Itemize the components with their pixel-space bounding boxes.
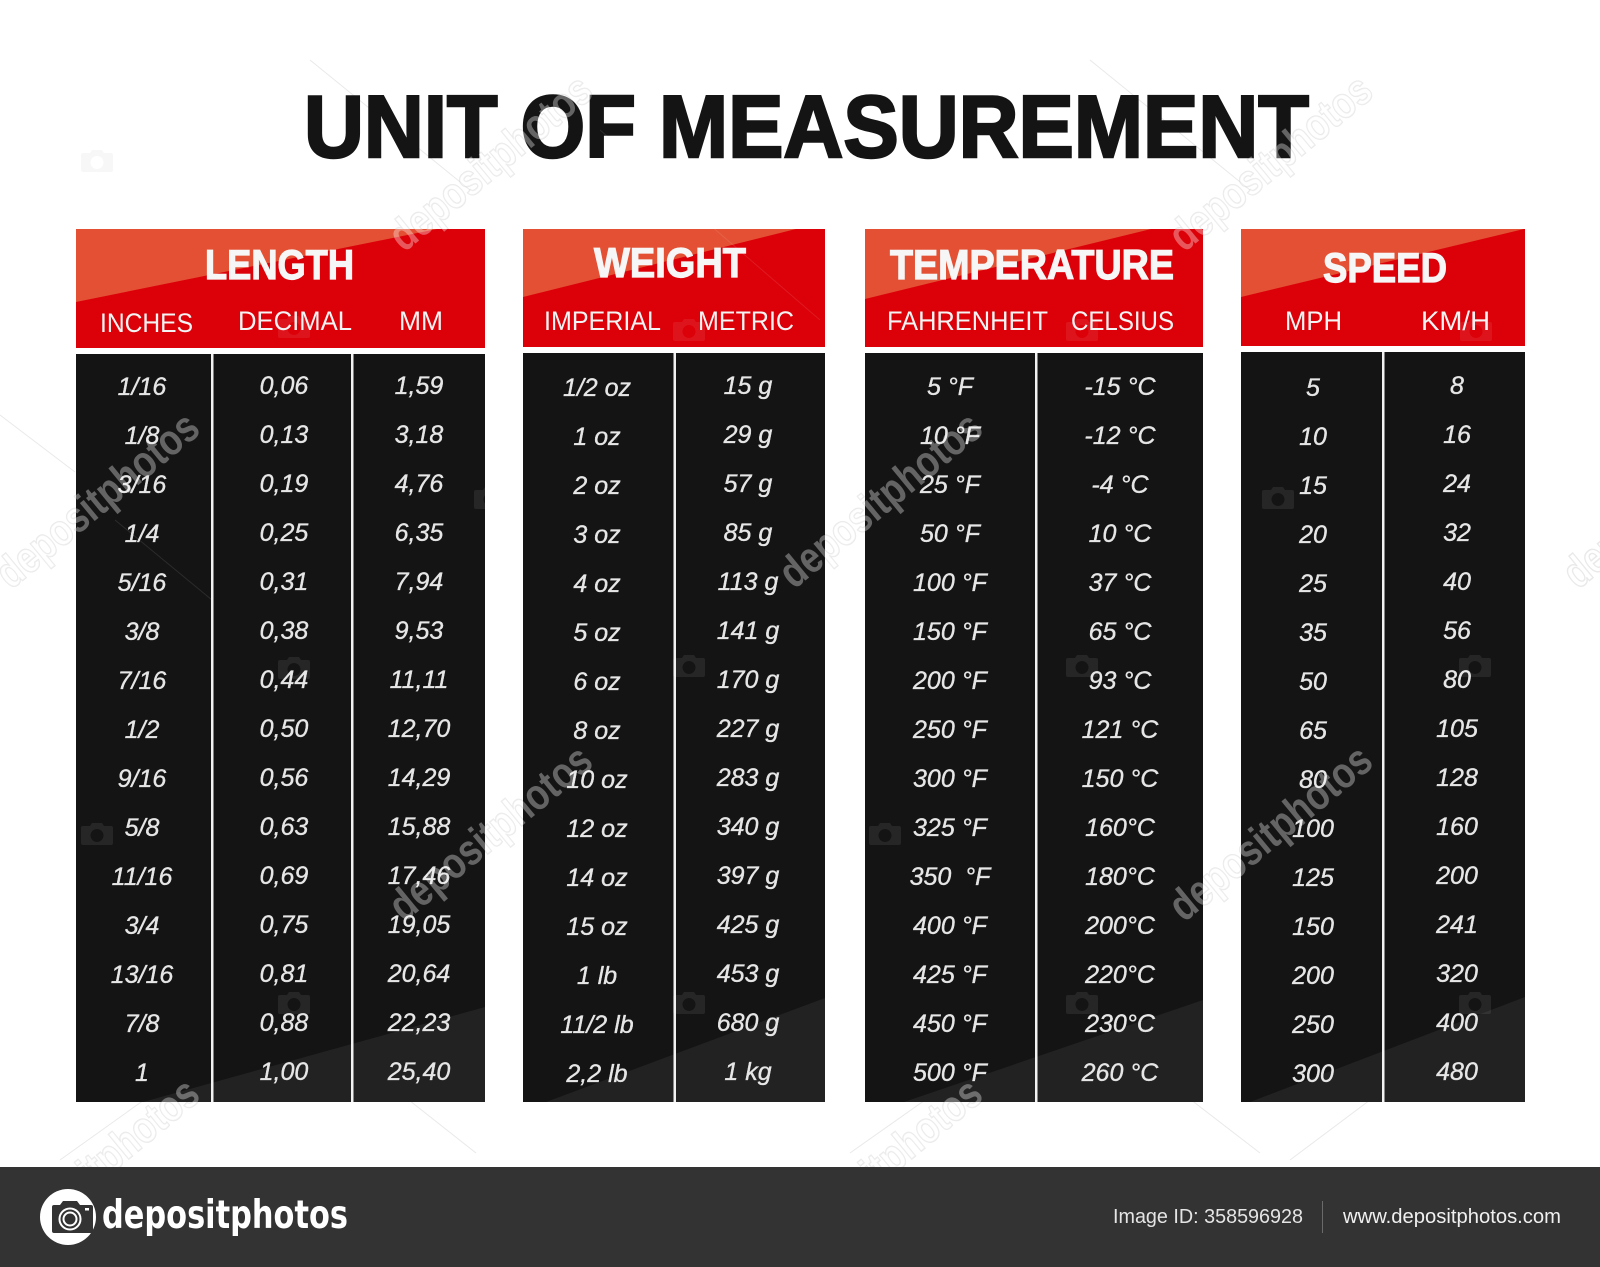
column: inches: 7/8 [125,1010,159,1038]
column: celsius: 150 °C [1082,765,1159,793]
column: inches: 11/16 [112,863,172,891]
column: km/h: 241 [1435,911,1478,939]
column: mph [1291,374,1334,1088]
weight header: IMPERIAL [544,306,661,336]
column: mm: 7,94 [395,568,443,596]
column: inches: 7/16 [118,667,166,695]
panel: temperature [865,229,1203,1102]
column: mph: 50 [1299,668,1327,696]
column: mph: 250 [1291,1011,1334,1039]
panel: length [76,229,485,1102]
watermark overlay on dark and red areas: depositphotos [1159,735,1382,931]
length header: LENGTH [205,241,354,288]
column: metric: 227 g [716,715,779,743]
length header: INCHES [100,308,193,338]
column: metric: 85 g [724,519,772,547]
column: km/h: 160 [1436,813,1478,841]
column: metric: 680 g [717,1009,779,1037]
column: celsius: 121 °C [1082,716,1159,744]
column: decimal: 0,81 [260,960,308,988]
column: metric: 57 g [724,470,772,498]
weight table body [523,353,825,1102]
column: mm: 9,53 [395,617,443,645]
column: km/h [1435,372,1478,1086]
column: km/h: 200 [1435,862,1478,890]
column: mph: 15 [1299,472,1327,500]
watermark outlines on the white background: depositphotos [769,402,992,598]
column: mph: 150 [1292,913,1334,941]
column: celsius: -4 °C [1091,471,1150,499]
column: inches: 1/16 [118,373,166,401]
column: celsius: 230°C [1084,1010,1156,1038]
column: imperial: 11/2 lb [560,1011,634,1039]
watermark outlines on the white background: depositphotos [769,1068,992,1264]
column: decimal: 0,69 [260,862,308,890]
column: metric: 170 g [717,666,779,694]
column: imperial: 14 oz [566,864,628,892]
column: celsius: 37 °C [1089,569,1152,597]
column: mph: 200 [1291,962,1334,990]
column: celsius: 93 °C [1089,667,1152,695]
column: decimal: 0,44 [260,666,308,694]
column: km/h: 24 [1442,470,1471,498]
column: imperial: 5 oz [573,619,621,647]
column: metric: 425 g [717,911,779,939]
column: fahrenheit: 400 °F [913,912,989,940]
column: fahrenheit: 10 °F [920,422,982,450]
column: fahrenheit: 450 °F [913,1010,989,1038]
column: imperial: 2,2 lb [565,1060,628,1088]
column: mph: 300 [1292,1060,1334,1088]
column: inches: 3/16 [118,471,166,499]
column: decimal: 0,75 [260,911,308,939]
column: km/h: 8 [1450,372,1464,400]
column: mm: 22,23 [387,1009,450,1037]
column: celsius: 10 °C [1089,520,1152,548]
column: metric: 29 g [723,421,772,449]
column: imperial: 8 oz [573,717,621,745]
column: celsius: 180°C [1085,863,1156,891]
column: metric: 141 g [717,617,779,645]
column: inches: 5/8 [125,814,159,842]
logo wordmark: depositphotos [102,1193,348,1238]
column: imperial: 1 lb [577,962,617,990]
column: mph: 25 [1298,570,1327,598]
column: imperial: 10 oz [566,766,628,794]
column: mm: 25,40 [387,1058,450,1086]
column: celsius: 65 °C [1089,618,1152,646]
temperature header: CELSIUS [1071,306,1174,336]
column: mm: 1,59 [395,372,443,400]
watermark outlines on the white background: depositphotos [1159,735,1382,931]
column: fahrenheit: 5 °F [927,373,975,401]
column: imperial: 12 oz [566,815,628,843]
column: km/h: 105 [1436,715,1478,743]
column: km/h: 480 [1436,1058,1478,1086]
watermark overlay on dark and red areas: depositphotos [379,65,602,261]
length header: DECIMAL [238,306,352,336]
column: fahrenheit: 300 °F [913,765,989,793]
column: fahrenheit: 350 °F [910,863,992,891]
column: celsius [1081,373,1159,1087]
column: mph: 5 [1306,374,1320,402]
column: fahrenheit: 25 °F [919,471,982,499]
column: mm: 19,05 [388,911,450,939]
column: mm: 20,64 [387,960,450,988]
column: inches: 9/16 [118,765,166,793]
column: mph: 80 [1299,766,1327,794]
column: decimal: 0,31 [260,568,308,596]
column: celsius: 200°C [1084,912,1156,940]
column: inches: 1/8 [125,422,159,450]
column: inches: 1/2 [125,716,159,744]
length table body [76,354,485,1102]
column: inches: 1 [135,1059,149,1087]
temperature table body [865,353,1203,1102]
speed table body [1241,352,1525,1102]
column: inches: 5/16 [118,569,166,597]
column: mm: 12,70 [388,715,450,743]
column: inches [111,373,173,1087]
speed header [1241,229,1525,346]
column: mph: 125 [1292,864,1334,892]
column: fahrenheit [910,373,992,1087]
column: mm: 14,29 [388,764,450,792]
column: decimal [260,372,308,1086]
column: decimal: 0,13 [260,421,308,449]
column: km/h: 320 [1436,960,1478,988]
column: mph: 65 [1299,717,1327,745]
column: inches: 13/16 [111,961,173,989]
watermark outlines on the white background: depositphotos [379,735,602,931]
column: fahrenheit: 425 °F [913,961,989,989]
column: celsius: -12 °C [1084,422,1157,450]
weight header: WEIGHT [594,239,746,286]
column: inches: 1/4 [125,520,159,548]
speed header: MPH [1285,306,1342,336]
column: fahrenheit: 50 °F [920,520,982,548]
column: km/h: 80 [1443,666,1471,694]
image id: Image ID: 358596928 [1113,1206,1303,1228]
column: metric: 15 g [724,372,772,400]
column: km/h: 16 [1443,421,1471,449]
column: metric: 453 g [717,960,779,988]
column: fahrenheit: 100 °F [913,569,989,597]
column: mph: 20 [1298,521,1327,549]
column: metric: 1 kg [724,1058,772,1086]
column: mm [387,372,450,1086]
column: mm: 11,11 [390,666,448,694]
column: metric: 340 g [717,813,779,841]
column: imperial: 3 oz [573,521,621,549]
watermark outlines on the white background: depositphotos [1159,65,1382,261]
temperature header [865,229,1203,347]
column: km/h: 400 [1436,1009,1478,1037]
watermark overlay on dark and red areas: depositphotos [379,735,602,931]
column: imperial: 15 oz [566,913,628,941]
length header [76,229,485,348]
temperature header: FAHRENHEIT [887,306,1048,336]
temperature header: TEMPERATURE [890,241,1174,288]
column: decimal: 1,00 [260,1058,308,1086]
weight header: METRIC [698,306,794,336]
watermark camera icons [81,316,1492,1014]
column: metric: 397 g [717,862,779,890]
column: decimal: 0,63 [260,813,308,841]
column: celsius: -15 °C [1084,373,1157,401]
column: mm: 4,76 [395,470,443,498]
speed header: SPEED [1323,244,1447,291]
watermark overlay on dark and red areas: depositphotos [769,402,992,598]
icon: depositphotos camera logo [40,1189,96,1245]
column: decimal: 0,38 [260,617,308,645]
column: decimal: 0,19 [260,470,308,498]
column: imperial: 2 oz [572,472,621,500]
website url: www.depositphotos.com [1342,1206,1561,1228]
panel: weight [523,229,825,1102]
column: km/h: 32 [1443,519,1471,547]
column: inches: 3/8 [125,618,159,646]
column: celsius: 160°C [1085,814,1156,842]
column: fahrenheit: 250 °F [912,716,989,744]
column: imperial: 6 oz [573,668,621,696]
column: km/h: 128 [1436,764,1478,792]
column: km/h: 56 [1443,617,1471,645]
column: celsius: 220°C [1084,961,1156,989]
column: imperial: 1 oz [573,423,621,451]
column: mm: 6,35 [395,519,443,547]
column: imperial: 4 oz [573,570,621,598]
speed header: KM/H [1421,306,1490,336]
watermark overlay on dark and red areas: depositphotos [769,1068,992,1264]
column: decimal: 0,25 [260,519,308,547]
column: mm: 17,46 [388,862,450,890]
column: decimal: 0,50 [260,715,308,743]
column: celsius: 260 °C [1081,1059,1159,1087]
column: decimal: 0,88 [260,1009,308,1037]
column: fahrenheit: 325 °F [913,814,989,842]
column: decimal: 0,06 [260,372,308,400]
column: fahrenheit: 150 °F [913,618,989,646]
column: mm: 15,88 [388,813,450,841]
column: metric: 113 g [718,568,778,596]
column: inches: 3/4 [125,912,159,940]
length header: MM [399,306,443,336]
column: mph: 100 [1292,815,1334,843]
watermark overlay on dark and red areas: depositphotos [1159,65,1382,261]
column: metric: 283 g [716,764,779,792]
column: fahrenheit: 200 °F [912,667,989,695]
panel: speed [1241,229,1525,1102]
footer bar [0,1167,1600,1267]
weight header [523,229,825,347]
column: mm: 3,18 [395,421,443,449]
column: imperial: 1/2 oz [563,374,632,402]
column: km/h: 40 [1443,568,1471,596]
column: metric [716,372,779,1086]
column: decimal: 0,56 [260,764,308,792]
column: fahrenheit: 500 °F [913,1059,989,1087]
title: UNIT OF MEASUREMENT [304,77,1309,176]
column: mph: 10 [1299,423,1327,451]
watermark outlines on the white background: depositphotos [379,65,602,261]
column: imperial [560,374,634,1088]
column: mph: 35 [1299,619,1327,647]
